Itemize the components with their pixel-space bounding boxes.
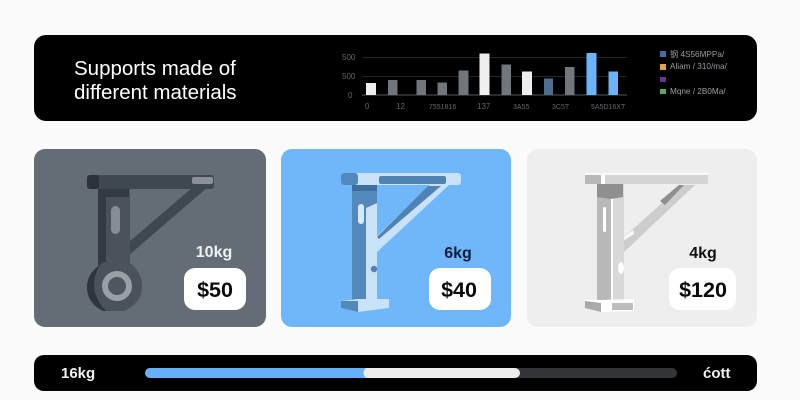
label: cost: ćott — [703, 365, 730, 382]
weight label: 10kg — [196, 244, 232, 261]
panel: header — [34, 35, 757, 121]
label: weight: 16kg — [61, 365, 95, 382]
icon: blue bracket — [341, 173, 461, 312]
panel: mid material card — [281, 149, 511, 327]
progress track — [145, 368, 677, 378]
bar chart — [342, 53, 627, 111]
chart axis labels: 0 — [348, 91, 353, 100]
panel: light material card — [527, 149, 757, 327]
price badge — [669, 268, 736, 310]
price badge: $40 — [441, 278, 477, 302]
chart axis labels: 5A5D16XT — [591, 104, 626, 111]
title: Supports made of — [74, 57, 236, 80]
weight label: 4kg — [689, 245, 717, 262]
chart axis labels: 7551816 — [429, 104, 456, 111]
price badge — [184, 268, 246, 310]
chart legend: Mqne / 2B0Ma/ — [670, 87, 726, 96]
chart axis labels: 3C5T — [552, 104, 570, 111]
panel: bottom scale bar — [34, 355, 757, 391]
chart axis labels: 137 — [477, 102, 491, 111]
chart axis labels: 0 — [365, 102, 370, 111]
title: different materials — [74, 81, 237, 104]
chart axis labels: 500 — [342, 72, 356, 81]
chart legend: 钢 4S56MPPa/ — [670, 49, 725, 59]
chart axis labels: 12 — [396, 102, 405, 111]
icon: dark bracket — [87, 175, 214, 311]
chart axis labels: 500 — [342, 53, 356, 62]
weight label: 6kg — [444, 245, 472, 262]
icon: grey bracket — [585, 173, 708, 312]
chart axis labels: 3A55 — [513, 104, 529, 111]
price badge — [429, 268, 491, 310]
price badge: $50 — [197, 278, 233, 302]
chart legend: Aliam / 310/ma/ — [670, 62, 728, 71]
chart axis labels — [342, 53, 626, 111]
panel: heavy material card — [34, 149, 266, 327]
chart legend — [660, 49, 728, 96]
price badge: $120 — [679, 278, 727, 302]
